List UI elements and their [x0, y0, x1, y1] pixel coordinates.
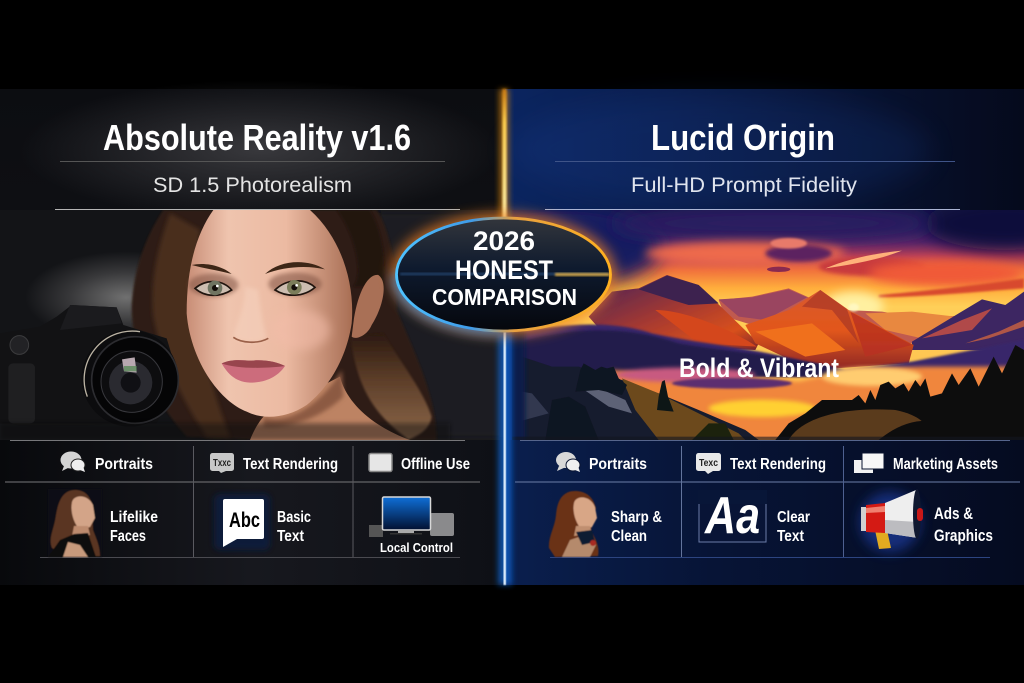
label: Sharp & Clean: [611, 509, 662, 545]
label: Lifelike Faces: Lifelike: [110, 509, 158, 526]
label: Portraits: Portraits: [589, 456, 647, 473]
panel: Lucid Origin: [462, 89, 1024, 585]
face: [187, 210, 352, 417]
label: Portraits: Portraits: [95, 456, 153, 473]
edge fades: [512, 331, 528, 440]
table: left features: [0, 440, 504, 585]
label: Basic Text: Text: [277, 528, 305, 545]
label: Clear Text: Text: [777, 528, 805, 545]
thumbnail: sharp woman: [549, 491, 598, 557]
camera: [0, 305, 178, 427]
landscape photo: [512, 210, 1024, 440]
label: Ads & Graphics: Graphics: [934, 526, 993, 545]
title: Absolute Reality v1.6: Absolute Reality v1.6: [103, 117, 411, 158]
mountains: [589, 275, 1024, 370]
badge text: [432, 226, 577, 310]
hair: [132, 210, 437, 440]
icon: text bubble: Texc: [699, 458, 718, 469]
fade at bottom: [125, 420, 448, 440]
label: Clear Text: [777, 509, 810, 545]
label: Basic Text: [277, 509, 311, 545]
badge text: 2026: [473, 226, 535, 256]
nose: [236, 289, 266, 341]
label: Clear Text: Clear: [777, 509, 810, 526]
table: right features: [505, 440, 1024, 585]
icon: overlapping cards: [854, 453, 884, 473]
right forest: [775, 345, 1024, 440]
subtitle: Full-HD Prompt Fidelity: Full-HD Prompt Fidelity: [631, 174, 858, 197]
icon: megaphone: [860, 489, 923, 552]
label: Lifelike Faces: [110, 509, 158, 545]
panel: Absolute Reality: [0, 80, 504, 585]
badge: 2026 Honest Comparison: [390, 212, 616, 336]
eyes: [195, 282, 232, 295]
subtitle: SD 1.5 Photorealism: SD 1.5 Photorealism: [153, 174, 352, 197]
brows: [192, 264, 232, 274]
label: Marketing Assets: Marketing Assets: [893, 456, 998, 473]
hair lock over shoulder: [351, 333, 432, 439]
lips: [222, 360, 285, 383]
neck: [250, 377, 410, 440]
centre beam: [498, 89, 512, 585]
caption: Bold & Vibrant: Bold & Vibrant: [679, 353, 839, 383]
icon: Abc speech card: Abc: [229, 509, 260, 532]
label: Basic Text: Basic: [277, 509, 311, 526]
label: Offline Use: Offline Use: [401, 456, 470, 473]
icon: Abc speech card: [214, 494, 270, 550]
icon: Aa sample: Aa: [703, 487, 760, 545]
icon: chat bubbles: [60, 452, 85, 472]
badge text: COMPARISON: [432, 284, 577, 310]
left slope and trees: [512, 353, 759, 440]
clouds: [462, 197, 1024, 322]
badge text: HONEST: [455, 255, 553, 285]
label: Ads & Graphics: [934, 504, 993, 545]
ear: [352, 275, 384, 338]
portrait photo with camera: [0, 210, 504, 440]
thumbnail: lifelike woman: [48, 489, 102, 557]
valley glow: [612, 367, 1024, 440]
label: Ads & Graphics: Ads &: [934, 504, 973, 523]
lower hills: [512, 325, 1024, 377]
label: Lifelike Faces: Faces: [110, 528, 146, 545]
icon: text bubble: [210, 453, 234, 473]
icon: desktop computer: [369, 497, 454, 537]
icon: text bubble: [696, 453, 721, 474]
label: Sharp & Clean: Clean: [611, 528, 647, 545]
label: Local Control: Local Control: [380, 540, 453, 555]
icon: monitor: [369, 454, 392, 472]
icon: chat bubbles: [556, 452, 580, 472]
icon: text bubble: Txxc: [213, 458, 231, 469]
label: Text Rendering: Text Rendering: [243, 456, 338, 473]
label: Text Rendering: Text Rendering: [730, 456, 826, 473]
title: Lucid Origin: Lucid Origin: [651, 117, 835, 158]
label: Sharp & Clean: Sharp &: [611, 509, 662, 526]
